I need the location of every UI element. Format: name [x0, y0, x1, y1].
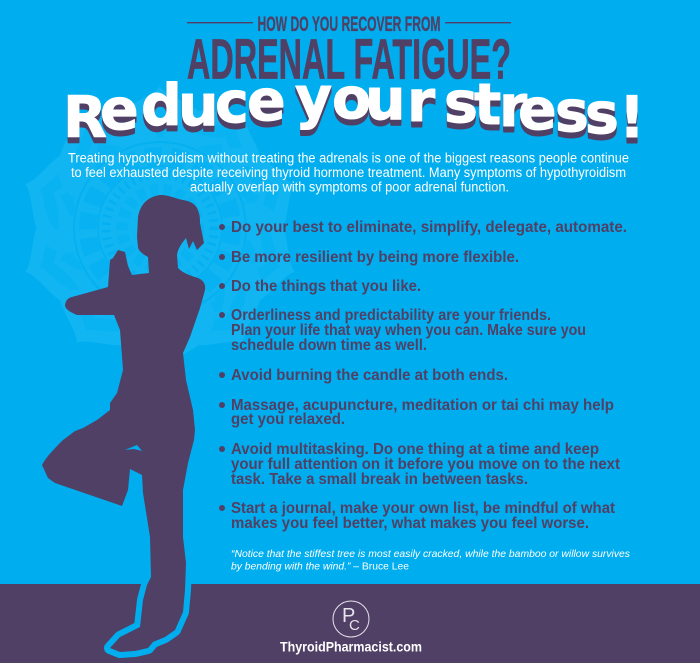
- bullet list: [219, 219, 627, 532]
- bullet 6: Massage, acupuncture, meditation or tai chi may help: [231, 397, 614, 414]
- silhouette: yoga tree pose: [42, 195, 205, 652]
- logo: PC monogram: [333, 601, 369, 637]
- logo: PC monogram: P: [342, 605, 355, 627]
- quote: by bending with the wind.” – Bruce Lee: [231, 560, 409, 572]
- bullet 8: makes you feel better, what makes you feel worse.: [231, 515, 589, 532]
- knee highlight: [125, 445, 142, 451]
- bullet 4: [219, 307, 586, 354]
- body silhouette: [42, 195, 205, 652]
- heading: reduce your stress: Reduce your stress!: [63, 65, 645, 151]
- bullet 1: Do your best to eliminate, simplify, delegate, automate.: [231, 219, 627, 236]
- bullet 6: [219, 397, 614, 428]
- logo: PC monogram: C: [349, 617, 360, 634]
- bullet 2: Be more resilient by being more flexible.: [231, 249, 519, 266]
- bullet 7: [219, 441, 620, 488]
- bullet 8: Start a journal, make your own list, be mindful of what: [231, 500, 615, 517]
- bullet 4: Plan your life that way when you can. Make sure you: [231, 322, 586, 339]
- foot outline: [104, 584, 192, 658]
- bullet 7: your full attention on it before you move on to the next: [231, 456, 620, 473]
- quote: [231, 548, 631, 572]
- website url: ThyroidPharmacist.com: [280, 638, 422, 654]
- bullet 4: schedule down time as well.: [231, 337, 427, 354]
- bullet 7: task. Take a small break in between tasks.: [231, 471, 528, 488]
- bullet 8: [219, 500, 615, 532]
- intro paragraph: actually overlap with symptoms of poor adrenal function.: [190, 180, 509, 194]
- heading: how do you recover from: HOW DO YOU RECOVER FROM: [258, 13, 440, 36]
- intro paragraph: Treating hypothyroidism without treating the adrenals is one of the biggest reasons people continue: [68, 150, 629, 166]
- bullet 6: get you relaxed.: [231, 411, 345, 428]
- band: footer: [0, 584, 700, 663]
- bullet 5: Avoid burning the candle at both ends.: [231, 367, 508, 384]
- intro paragraph: to feel exhausted despite receiving thyroid hormone treatment. Many symptoms of hypothyroidism: [71, 165, 626, 180]
- intro paragraph: [68, 150, 629, 194]
- bullet 4: Orderliness and predictability are your friends.: [231, 307, 551, 324]
- mandala decoration: [8, 81, 312, 375]
- bullet 7: Avoid multitasking. Do one thing at a time and keep: [231, 441, 599, 458]
- bullet 3: Do the things that you like.: [231, 278, 421, 295]
- quote: “Notice that the stiffest tree is most easily cracked, while the bamboo or willow survives: [231, 548, 631, 560]
